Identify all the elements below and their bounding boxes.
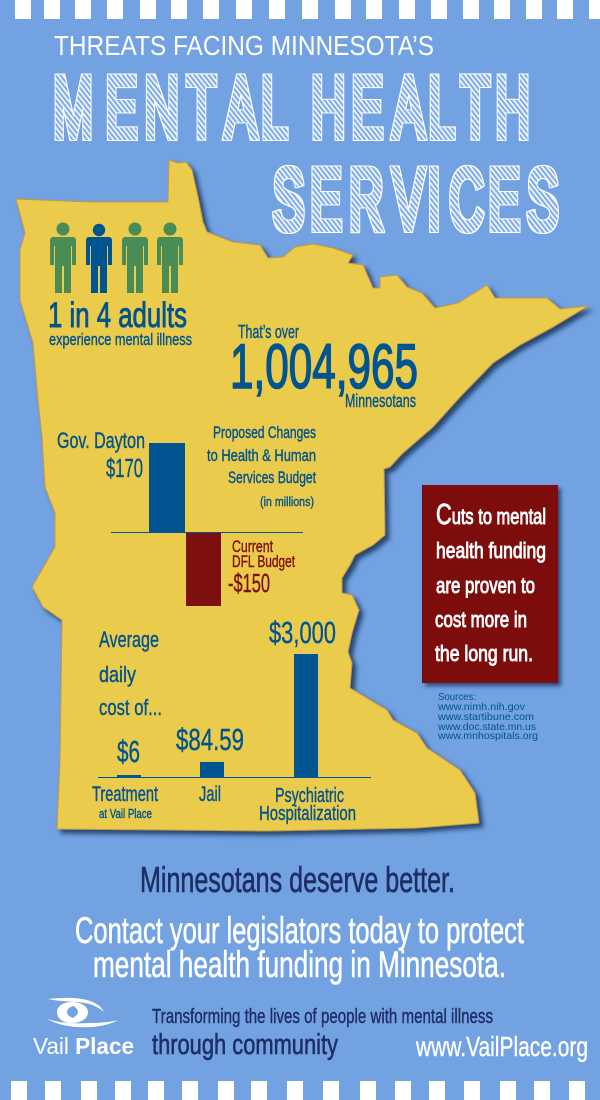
- callout: cuts to mental health funding: [422, 485, 558, 683]
- chart: average daily cost: cost of...: [99, 695, 162, 720]
- chart: proposed budget changes: DFL Budget: [232, 552, 295, 571]
- sources: [437, 691, 538, 742]
- title: threats facing: THREATS FACING MINNESOTA’S: [54, 30, 434, 61]
- sources: www.doc.state.mn.us: [437, 721, 536, 733]
- top white square border: [15, 0, 600, 19]
- chart: average daily cost: Jail: [199, 783, 221, 806]
- stat: 1,004,965 Minnesotans: [230, 322, 418, 411]
- chart: proposed budget changes: -$150: [228, 568, 270, 598]
- callout: cuts to mental health funding: Cuts to mental: [436, 499, 546, 531]
- sources: www.mnhospitals.org: [437, 730, 538, 742]
- map of Minnesota: [16, 160, 588, 831]
- chart: proposed budget changes: Current: [232, 537, 273, 556]
- stat: 1,004,965 Minnesotans: That’s over: [238, 322, 299, 342]
- sources: Sources:: [438, 691, 476, 703]
- chart: average daily cost: $3,000: [269, 615, 336, 650]
- chart: proposed budget changes: $170: [106, 453, 143, 483]
- callout: cuts to mental health funding: the long run.: [435, 641, 533, 666]
- heading: proposed changes: [207, 423, 316, 509]
- logo: Vail Place: Vail Place: [33, 1033, 134, 1059]
- heading: proposed changes: (in millions): [260, 494, 314, 509]
- chart: average daily cost: daily: [99, 662, 136, 687]
- stat: 1,004,965 Minnesotans: 1,004,965: [230, 332, 418, 402]
- heading: proposed changes: Proposed Changes: [213, 423, 316, 442]
- chart: average daily cost: Treatment: [92, 783, 158, 806]
- icon: person 2: [86, 224, 112, 293]
- sources: www.nimh.nih.gov: [437, 701, 526, 713]
- chart: average daily cost: Psychiatric: [275, 785, 344, 807]
- chart: average daily cost: Average: [99, 627, 159, 652]
- chart: average daily cost: [92, 615, 371, 825]
- logo: Vail Place: [33, 998, 134, 1059]
- chart: proposed budget changes: Gov. Dayton: [57, 428, 145, 453]
- chart: average daily cost: at Vail Place: [99, 806, 152, 821]
- callout: cuts to mental health funding: health funding: [436, 538, 546, 563]
- title: services: SERVICES: [273, 151, 558, 248]
- heading: proposed changes: Services Budget: [228, 468, 316, 487]
- chart: average daily cost: Hospitalization: [259, 803, 356, 825]
- icon: person 4: [157, 222, 183, 293]
- people icons: 1 in 4: [50, 222, 183, 293]
- chart: average daily cost: $84.59: [176, 722, 244, 757]
- icon: interlocked crescents: [47, 998, 118, 1027]
- title: mental health: MENTALHEALTH: [53, 59, 530, 156]
- callout: cuts to mental health funding: are proven to: [436, 573, 535, 598]
- tagline: [152, 1006, 493, 1061]
- heading: Minnesotans deserve better: Minnesotans deserve better.: [140, 859, 455, 900]
- chart: proposed budget changes: [57, 428, 303, 606]
- callout: cuts to mental health funding: cost more in: [435, 607, 527, 632]
- chart: average daily cost: $6: [117, 734, 140, 769]
- caption: experience mental illness: experience mental illness: [49, 330, 192, 349]
- tagline: through community: [152, 1029, 338, 1061]
- bottom white square border: [11, 1081, 585, 1100]
- stat: 1 in 4 adults: 1 in 4 adults: [48, 296, 187, 335]
- tagline: Transforming the lives of people with mental illness: [152, 1006, 493, 1028]
- stat: 1,004,965 Minnesotans: Minnesotans: [345, 391, 416, 411]
- call to action: [75, 910, 524, 985]
- icon: person 1: [50, 222, 76, 293]
- icon: person 3: [122, 222, 148, 293]
- sources: www.startibune.com: [437, 711, 534, 723]
- heading: proposed changes: to Health & Human: [207, 446, 316, 465]
